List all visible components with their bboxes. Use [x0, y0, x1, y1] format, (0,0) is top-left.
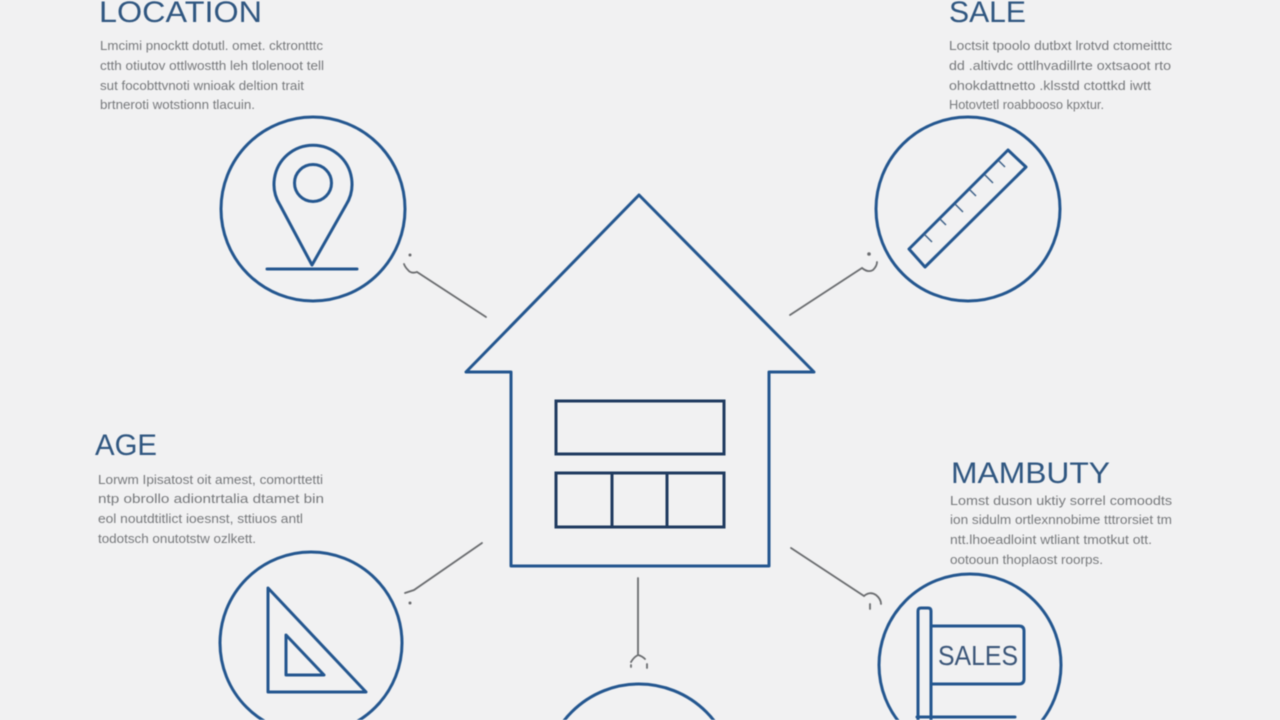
panel: location [99, 0, 324, 112]
connector: mambuty [791, 548, 881, 609]
text block: location [100, 39, 324, 112]
text block: mambuty: ootooun thoplaost roorps. [950, 553, 1103, 567]
connector: bottom [631, 578, 647, 668]
text block: sale: Loctsit tpoolo dutbxt lrotvd ctomeitttc [949, 39, 1172, 53]
text block: location: Lmcimi pnocktt dotutl. omet. cktrontttc [100, 39, 323, 53]
icon: set square [220, 552, 402, 720]
text block: location: ctth otiutov ottlwostth leh tlolenoot tell [100, 59, 324, 73]
text block: mambuty: Lomst duson uktiy sorrel comoodts [950, 494, 1172, 508]
central house icon [466, 195, 814, 566]
text block: age: Lorwm Ipisatost oit amest, comorttetti [98, 473, 323, 487]
text block: sale: Hotovtetl roabbooso kpxtur. [949, 98, 1104, 112]
upper window [556, 401, 724, 454]
text block: mambuty: ion sidulm ortlexnnobime tttrorsiet tm [950, 513, 1172, 527]
heading: age: AGE [95, 429, 157, 462]
icon: sales sign [879, 574, 1061, 720]
heading: mambuty: MAMBUTY [951, 457, 1110, 490]
text block: location: sut focobttvnoti wnioak deltion trait [100, 79, 305, 93]
connector: age [405, 543, 482, 604]
text block: age: ntp obrollo adiontrtalia dtamet bin [98, 492, 324, 506]
house outline [466, 195, 814, 566]
icon: ruler [876, 117, 1060, 301]
connector: sale [790, 252, 877, 315]
panel: mambuty [950, 457, 1172, 567]
connector: location [404, 254, 486, 317]
text block: sale: dd .altivdc ottlhvadillrte oxtsaoot rto [949, 59, 1171, 73]
text block: sale [949, 39, 1172, 112]
text block: mambuty: ntt.lhoeadloint wtliant tmotkut ott. [950, 533, 1152, 547]
text block: age: eol noutdtitlict ioesnst, sttiuos antl [98, 512, 303, 526]
lower window [556, 473, 724, 527]
text block: sale: ohokdattnetto .klsstd ctottkd iwtt [949, 79, 1152, 93]
panel: age [95, 429, 324, 546]
icon: bottom circle [544, 684, 734, 720]
text block: age: todotsch onutotstw ozlkett. [98, 532, 256, 546]
text block: mambuty [950, 494, 1172, 567]
panel: sale [949, 0, 1172, 112]
icon: location pin [221, 117, 405, 301]
sales sign label: SALES [938, 640, 1018, 671]
text block: location: brtneroti wotstionn tlacuin. [100, 98, 255, 112]
text block: age [98, 473, 324, 546]
